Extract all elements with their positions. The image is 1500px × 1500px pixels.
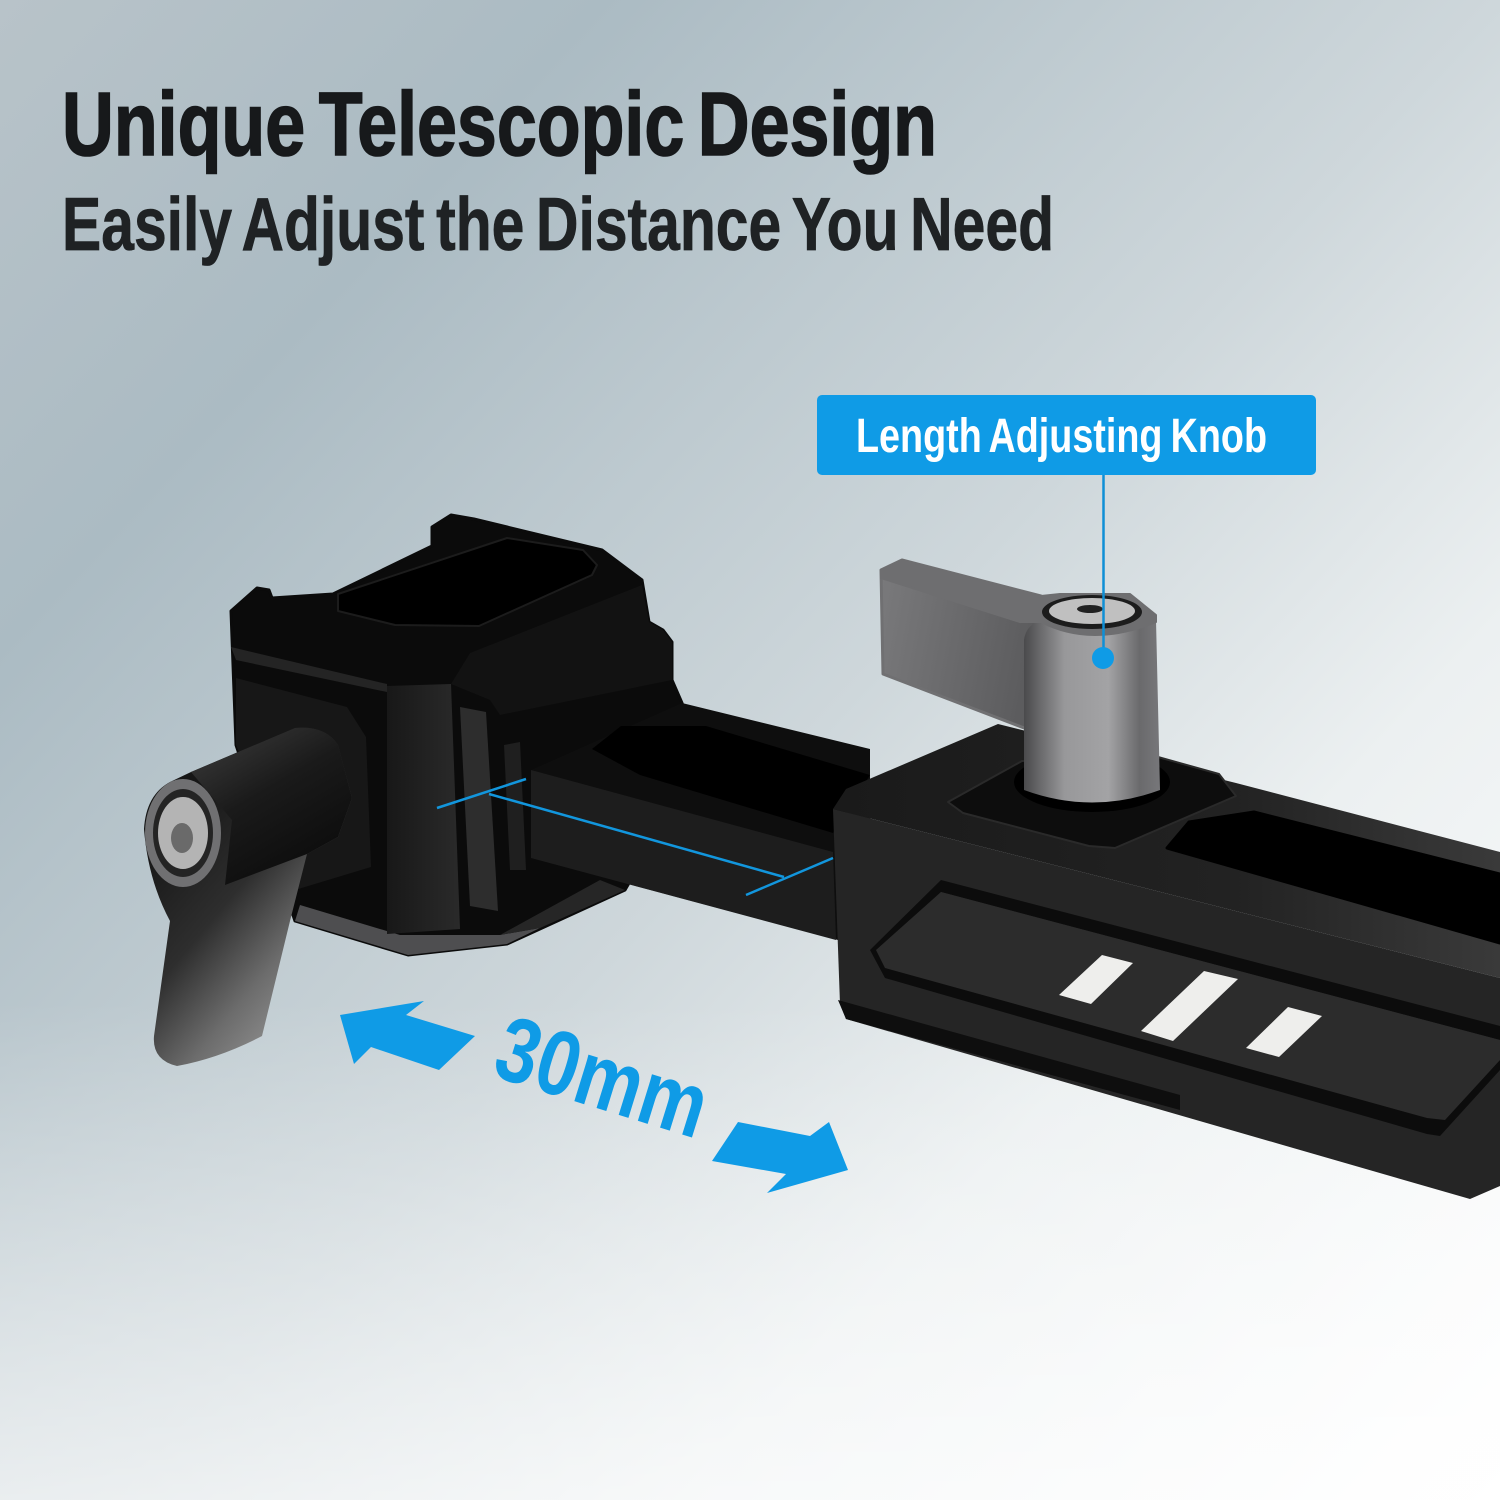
subtitle: Easily Adjust the Distance You Need bbox=[62, 182, 1054, 266]
callout: length adjusting knob: Length Adjusting Knob bbox=[856, 410, 1267, 463]
length adjusting knob bbox=[881, 560, 1170, 812]
left clamp block bbox=[231, 515, 700, 955]
product: telescopic arm bbox=[144, 515, 1500, 1199]
lever screw bbox=[145, 779, 221, 887]
callout: length adjusting knob bbox=[817, 395, 1316, 669]
blue dimension lines bbox=[437, 779, 833, 895]
white window marks bbox=[1059, 955, 1322, 1057]
title: Unique Telescopic Design bbox=[62, 75, 937, 175]
30mm measurement: 30mm bbox=[484, 997, 721, 1158]
right slider block bbox=[833, 724, 1500, 1199]
knob screw bbox=[1042, 595, 1142, 629]
left arrow bbox=[340, 1001, 475, 1070]
right arrow bbox=[712, 1122, 848, 1193]
telescopic rail bbox=[531, 703, 870, 940]
left locking lever bbox=[144, 728, 352, 1066]
